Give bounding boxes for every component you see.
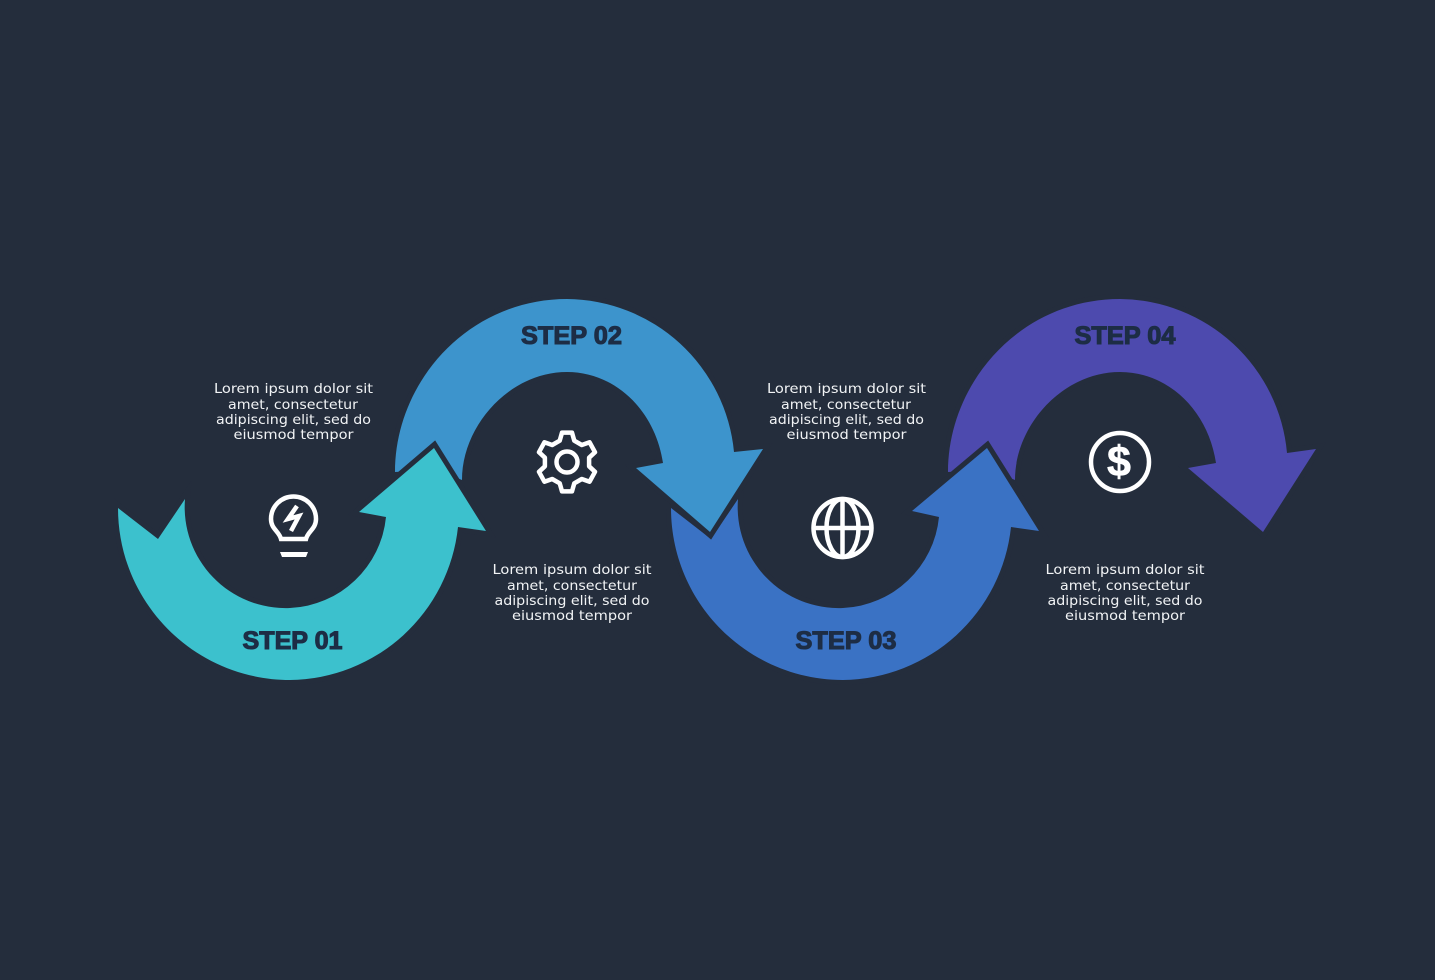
heading: step 01: STEP 01 [242,627,343,655]
icon: dollar coin [1091,433,1149,491]
arrow: step 02 [395,299,763,532]
arrow: step 01 [118,448,486,680]
text block: step 01: eiusmod tempor [234,427,354,443]
text block: step 03: eiusmod tempor [786,427,907,443]
heading: step 04: STEP 04 [1074,322,1176,350]
text block: step 03: Lorem ipsum dolor sit [767,381,926,397]
heading: step 03: STEP 03 [796,627,896,655]
text block: step 03: adipiscing elit, sed do [769,412,924,428]
text block: step 04 [1046,562,1204,624]
text block: step 01: amet, consectetur [228,397,358,413]
text block: step 04: adipiscing elit, sed do [1048,593,1202,609]
text block: step 02: Lorem ipsum dolor sit [492,562,652,578]
text block: step 01: Lorem ipsum dolor sit [214,381,373,397]
text block: step 04: Lorem ipsum dolor sit [1046,562,1204,578]
text block: step 02: amet, consectetur [507,578,637,594]
icon: light bulb [271,497,316,557]
text block: step 03 [767,381,926,443]
text block: step 02 [492,562,652,624]
text block: step 03: amet, consectetur [781,397,911,413]
text block: step 02: eiusmod tempor [512,608,632,624]
text block: step 02: adipiscing elit, sed do [494,593,650,609]
icon: globe [814,499,872,557]
arrow: step 03 [671,448,1039,680]
arrow: step 04 [948,299,1316,532]
icon: dollar coin: $ [1107,438,1131,486]
text block: step 01 [214,381,373,443]
heading: step 02: STEP 02 [521,322,622,350]
text block: step 04: amet, consectetur [1060,578,1190,594]
icon: gear [539,433,595,491]
text block: step 01: adipiscing elit, sed do [216,412,371,428]
text block: step 04: eiusmod tempor [1065,608,1185,624]
